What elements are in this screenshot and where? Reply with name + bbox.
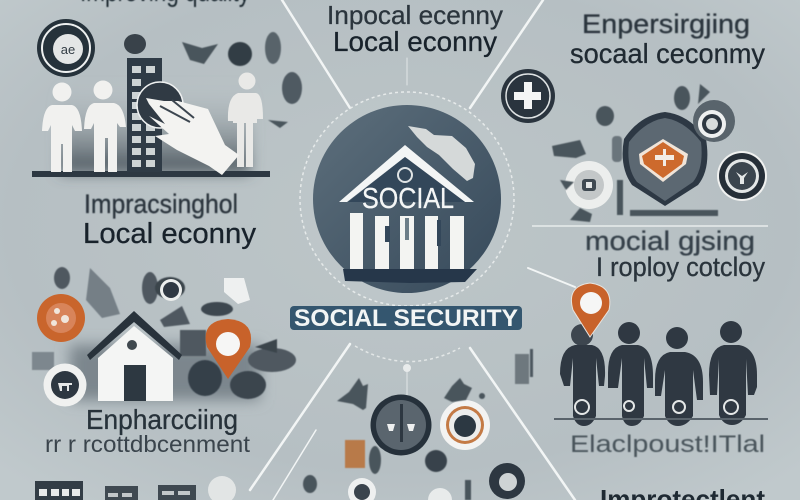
person 3 [228,72,263,167]
icon: plus badge [501,69,555,123]
icon: white shape [224,278,250,304]
icon: hand pressing button [137,82,239,175]
icon: white badge with dark centre [44,364,86,406]
roof fill [348,157,465,202]
garbled caption: Elaclpoust!ITlal [570,431,765,458]
base line [32,171,270,177]
text line 1: mocial gjsing [585,226,755,256]
panel: top centre heading [327,0,503,57]
banner shape [290,306,522,330]
panel: bottom centre icons [303,346,525,500]
heading line 1: Enpersirgjing [582,9,750,39]
banner: SOCIAL SECURITY [290,305,522,332]
text: SOCIAL: SOCIAL [362,183,454,215]
text: improving label: Impracsinghol [84,189,238,219]
icon: small badge [160,279,182,301]
icon: round badge [37,19,95,77]
scattered shapes [32,267,296,399]
base line [554,418,768,420]
icon: white badge left [565,161,613,209]
scene shadow [70,345,260,400]
icon: shield with orange cross [623,112,707,206]
text: heading line 1: Inpocal ecenny [327,0,503,30]
icon: house [87,311,182,401]
icon: small target badge [693,100,735,142]
person 2 [608,322,653,426]
panel: central social security emblem [300,92,514,306]
small knob [403,364,411,372]
text: local economy label: Local econny [83,218,256,250]
leaves and small shapes [303,378,485,500]
panel: top right, empowering social economy [501,9,768,282]
person 4 [709,321,757,425]
icon: white badge bottom [428,488,452,500]
person 2 [84,80,126,172]
text line 1: Enpharcciing [86,404,238,435]
icon: dark gauge badge [370,394,432,456]
dark disc [313,105,501,293]
map shape [408,126,475,181]
building tower [127,58,162,172]
panel: top left, improving local economy [32,0,302,250]
icon: orange location pin [206,319,251,379]
panel: bottom right, people group [515,283,768,500]
icon: badge lower right [489,463,525,499]
small building mark [515,349,533,384]
icons: scattered dark shapes [182,32,302,128]
person 1 [42,82,82,172]
base [343,269,477,283]
thin rule [532,225,768,227]
column notches [385,218,441,246]
white divider lines [250,0,575,500]
dotted arc [355,346,460,362]
icon: orange badge [37,294,85,342]
icon: small dark dot [124,34,146,54]
icon: orange location pin [571,283,610,337]
scene backdrop [60,85,250,173]
small roof emblem [398,168,412,182]
icon: white and orange badge [440,400,490,450]
panel: bottom left, enhancing environment [32,267,296,500]
dashed outer ring [300,92,514,306]
person 1 [560,324,605,426]
text line 2: I roploy cotcloy [596,252,765,282]
banner text: SOCIAL SECURITY [294,305,518,332]
icon: round badge: ae [61,42,75,57]
text line 2: rr r rcottdbcenment [45,431,251,457]
person 3 [655,327,703,426]
roof [339,145,474,202]
icon: target badge right [717,151,767,201]
icon row at bottom [35,476,236,500]
text: heading line 2: Local econny [333,26,497,57]
heading line 2: socaal ceconmy [570,38,765,69]
columns [350,213,464,269]
icon: badge lower left [348,478,376,500]
scattered dark shapes [552,84,718,222]
